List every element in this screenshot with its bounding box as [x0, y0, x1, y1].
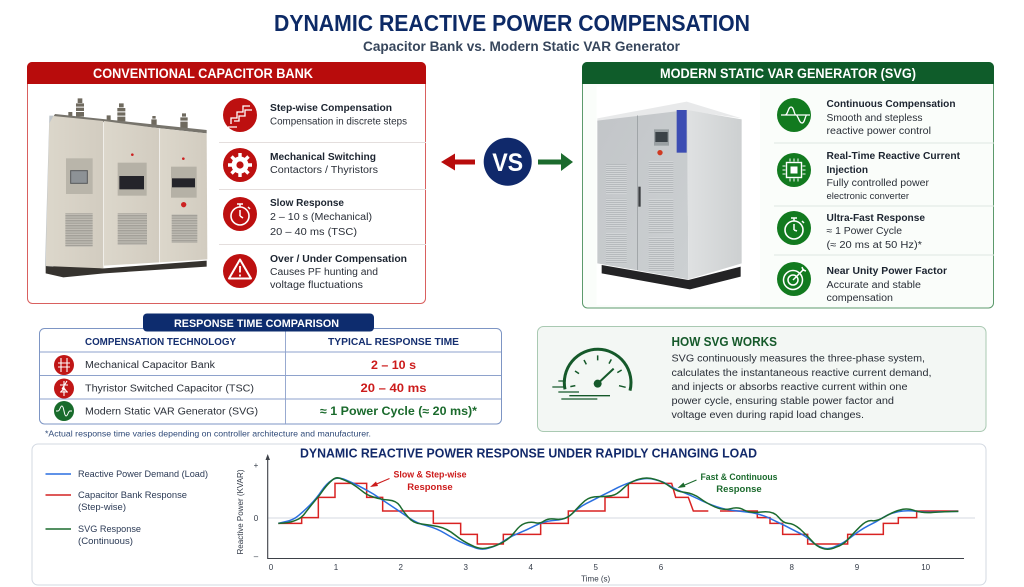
- feature: mechanical switching: Mechanical Switching: [270, 151, 376, 163]
- series: reactive power demand: [278, 478, 958, 549]
- x axis labels: 1: [334, 563, 339, 572]
- x axis labels: 6: [659, 563, 664, 572]
- axes: [266, 454, 964, 558]
- row: mechanical capacitor bank: 2 – 10 s: [371, 360, 416, 372]
- vs badge: VS: [492, 149, 523, 177]
- text: how svg works: power cycle, ensuring stable power factor and: [672, 396, 894, 407]
- feature: ultra-fast response: [777, 211, 925, 251]
- table: response time comparison: [40, 314, 502, 424]
- image: capacitor bank cabinets: [45, 98, 207, 277]
- feature: ultra-fast response: Ultra-Fast Response: [826, 212, 925, 224]
- y axis ticks: +: [254, 461, 259, 470]
- callout: slow and step-wise: Slow & Step-wise: [394, 470, 466, 480]
- table heading pill: RESPONSE TIME COMPARISON: [174, 318, 339, 330]
- x axis labels: 10: [921, 563, 931, 572]
- row: mechanical capacitor bank: [54, 355, 416, 375]
- feature: continuous compensation: Continuous Compensation: [826, 98, 956, 110]
- x axis labels: [269, 563, 931, 584]
- panel header: svg: MODERN STATIC VAR GENERATOR (SVG): [660, 66, 916, 81]
- series: capacitor bank: [278, 483, 958, 544]
- arrow: left red: [441, 154, 475, 170]
- legend: (Continuous): [78, 536, 133, 547]
- legend: [46, 469, 208, 547]
- feature: mechanical switching: Contactors / Thyristors: [270, 165, 378, 176]
- column headings: COMPENSATION TECHNOLOGY: [85, 337, 236, 348]
- x axis labels: 8: [789, 563, 794, 572]
- row: modern static var generator: Modern Static VAR Generator (SVG): [85, 406, 258, 418]
- feature: slow response: Slow Response: [270, 197, 344, 209]
- feature: real-time injection: Real-Time Reactive Current: [826, 150, 960, 162]
- x axis labels: 5: [593, 563, 598, 572]
- title: DYNAMIC REACTIVE POWER COMPENSATION: [274, 10, 750, 36]
- icon: sine wave: [777, 98, 811, 132]
- column headings: TYPICAL RESPONSE TIME: [328, 337, 459, 348]
- legend: Reactive Power Demand (Load): [78, 469, 208, 480]
- feature: continuous compensation: Smooth and stepless: [826, 113, 922, 124]
- x axis labels: 0: [269, 563, 274, 572]
- feature: near unity power factor: Near Unity Power Factor: [826, 265, 947, 277]
- feature: mechanical switching: [223, 148, 378, 182]
- text: how svg works: voltage even during rapid load changes.: [672, 410, 864, 421]
- vs badge: [484, 138, 532, 186]
- x axis labels: 3: [463, 563, 468, 572]
- chart: response curves: [235, 454, 975, 584]
- callout: fast and continuous: Response: [716, 484, 762, 495]
- panel header: svg: [582, 62, 994, 84]
- x axis labels: 4: [528, 563, 533, 572]
- row: mechanical capacitor bank: Mechanical Capacitor Bank: [85, 360, 216, 371]
- feature: over under compensation: Over / Under Compensation: [270, 253, 407, 265]
- feature: step-wise compensation: [223, 98, 407, 132]
- dividers: [219, 142, 426, 244]
- row: modern static var generator: ≈ 1 Power Cycle (≈ 20 ms)*: [320, 406, 478, 418]
- y axis ticks: [254, 461, 259, 561]
- series: svg response: [278, 478, 958, 549]
- chart title: DYNAMIC REACTIVE POWER RESPONSE UNDER RAPIDLY CHANGING LOAD: [300, 446, 757, 460]
- feature: continuous compensation: reactive power control: [826, 126, 931, 137]
- text: how svg works: [672, 354, 932, 421]
- footnote: *Actual response time varies depending on controller architecture and manufacturer.: [45, 428, 371, 438]
- legend: Capacitor Bank Response: [78, 490, 187, 501]
- heading: how svg works: HOW SVG WORKS: [672, 335, 777, 349]
- feature: ultra-fast response: (≈ 20 ms at 50 Hz)*: [826, 240, 922, 251]
- row: thyristor switched capacitor: Thyristor Switched Capacitor (TSC): [85, 384, 254, 394]
- feature: ultra-fast response: ≈ 1 Power Cycle: [826, 226, 902, 237]
- legend: SVG Response: [78, 524, 141, 535]
- panel header: capacitor bank: [27, 62, 426, 84]
- panel: conventional capacitor bank: [27, 62, 426, 304]
- feature: real-time injection: [777, 150, 960, 202]
- feature: continuous compensation: [777, 98, 956, 137]
- feature: slow response: [223, 197, 372, 238]
- row: thyristor switched capacitor: [54, 378, 426, 398]
- feature: over under compensation: [223, 253, 407, 291]
- legend: (Step-wise): [78, 502, 126, 513]
- feature: slow response: 20 – 40 ms (TSC): [270, 227, 357, 238]
- feature: near unity power factor: compensation: [826, 293, 893, 304]
- feature: real-time injection: Fully controlled power: [826, 178, 930, 189]
- callout: fast and continuous: [678, 472, 778, 495]
- icon: wave: [54, 401, 74, 421]
- arrow: right green: [538, 153, 573, 171]
- table heading pill: [143, 314, 374, 332]
- feature: step-wise compensation: Compensation in discrete steps: [270, 116, 407, 128]
- text: how svg works: and injects or absorbs reactive current within one: [672, 382, 908, 393]
- subtitle: Capacitor Bank vs. Modern Static VAR Generator: [363, 39, 681, 54]
- icon: capacitor grid: [54, 355, 74, 375]
- icon: speedometer: [552, 349, 631, 399]
- panel: dynamic response chart: [32, 444, 986, 585]
- feature: near unity power factor: [777, 262, 947, 304]
- icon: steps: [223, 98, 257, 132]
- x axis labels: 2: [398, 563, 403, 572]
- y axis ticks: –: [254, 552, 259, 561]
- panel: modern static var generator: [582, 62, 994, 308]
- feature: over under compensation: Causes PF hunting and: [270, 267, 378, 278]
- callout: slow and step-wise: Response: [407, 482, 453, 493]
- panel header: capacitor bank: CONVENTIONAL CAPACITOR BANK: [93, 66, 313, 81]
- icon: warning triangle: [223, 254, 257, 288]
- feature: over under compensation: voltage fluctuations: [270, 280, 363, 291]
- icon: chip: [777, 153, 811, 187]
- icon: stopwatch: [223, 197, 257, 231]
- panel: how svg works: [538, 326, 986, 432]
- icon: gear: [223, 148, 257, 182]
- icon: thyristor: [54, 378, 74, 398]
- dividers: [774, 143, 994, 255]
- text: how svg works: SVG continuously measures the three-phase system,: [672, 354, 925, 364]
- y axis label: Reactive Power (KVAR): [235, 469, 245, 554]
- feature: real-time injection: electronic converter: [826, 191, 910, 202]
- icon: stopwatch: [777, 211, 811, 245]
- x axis labels: 9: [855, 563, 860, 572]
- icon: target: [777, 262, 811, 296]
- x axis labels: Time (s): [581, 574, 611, 584]
- row: thyristor switched capacitor: 20 – 40 ms: [360, 383, 426, 395]
- column headings: [85, 337, 459, 348]
- image: svg cabinet: [597, 87, 760, 305]
- callout: fast and continuous: Fast & Continuous: [700, 472, 778, 483]
- feature: real-time injection: Injection: [826, 164, 868, 176]
- feature: slow response: 2 – 10 s (Mechanical): [270, 212, 372, 223]
- row: modern static var generator: [54, 401, 478, 421]
- callout: slow and step-wise: [370, 470, 466, 493]
- text: how svg works: calculates the instantaneous reactive current demand,: [672, 368, 932, 379]
- feature: step-wise compensation: Step-wise Compensation: [270, 102, 392, 114]
- feature: near unity power factor: Accurate and stable: [826, 280, 921, 291]
- y axis ticks: 0: [254, 514, 259, 523]
